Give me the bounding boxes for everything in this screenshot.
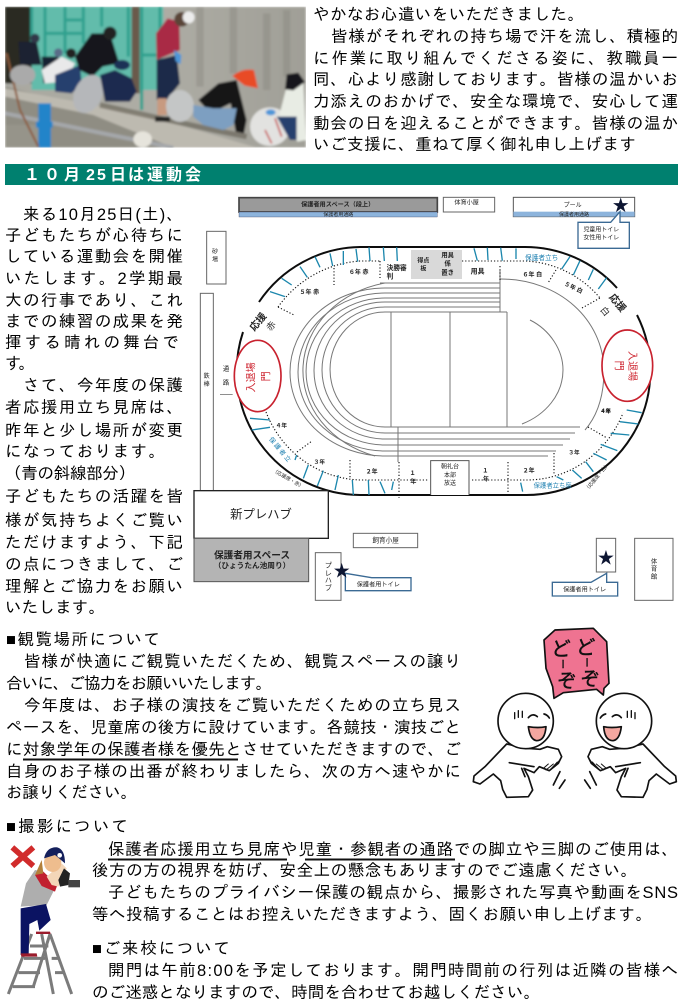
text block: coming to school: のご迷惑となりますので、時間を合わせてお越しください。 (92, 984, 540, 1002)
pool (513, 197, 635, 218)
section labels: 決勝審 (387, 263, 407, 272)
grade labels: ３年 (314, 458, 325, 466)
section labels: ４年 (600, 407, 612, 415)
text block: sports day introduction: 昨年と少し場所が変更 (5, 422, 183, 440)
text block: photography rules: 子どもたちのプライバシー保護の観点から、撮影された写真や動画をSNS (108, 884, 678, 902)
left entrance gate: 入退場 (245, 362, 258, 392)
callout: children's and women's toilets: ★ (612, 193, 630, 217)
cheering red label (247, 310, 278, 334)
section labels: 判 (387, 271, 394, 280)
prefab with toilet star: レ (325, 570, 332, 577)
gym storage shed (443, 197, 495, 212)
text block: sports day introduction: 様が気持ちよくご覧い (5, 512, 183, 530)
text block: sports day introduction: になっております。 (5, 443, 165, 461)
grade labels: ２年 (523, 467, 535, 475)
text block: thanks for the volunteers: 力添えのおかげで、安全な環境で、安心して運 (313, 92, 678, 111)
guardian space around the gourd pond: （ひょうたん池周り） (214, 560, 290, 570)
heading: sports day bar: １０月25日は運動会 (24, 166, 201, 184)
section labels: ５年 白 (563, 280, 584, 295)
section labels: ６年 白 (523, 270, 542, 278)
gym storage shed: 体育小屋 (454, 198, 479, 206)
right entrance gate: 門 (612, 361, 624, 371)
speech bubble: dozo dozo: ぞ (581, 670, 600, 691)
text block: viewing area: 今年度は、お子様の演技をご覧いただくための立ち見ス (24, 697, 461, 715)
sand pit: 場 (212, 255, 218, 263)
text block: sports day introduction: いたします。 (5, 599, 105, 617)
guardian standing labels: 保護者立ち席 (534, 481, 572, 490)
section labels: 置き (441, 268, 454, 276)
gymnasium: 育 (651, 564, 657, 573)
callout: guardian toilet near prefab: 保護者用トイレ (357, 580, 400, 588)
gymnasium (635, 538, 673, 600)
passage label (220, 363, 233, 394)
text block: thanks for the volunteers: 動会の日を迎えることができます。皆様の温か (313, 115, 678, 133)
left entrance gate (234, 340, 281, 412)
toilet building with star (596, 538, 616, 572)
chart: school grounds map (194, 193, 673, 600)
speech bubble: dozo dozo (544, 628, 609, 698)
grade labels: ３年 (568, 448, 580, 456)
morning assembly stand (431, 461, 469, 495)
speech bubble: dozo dozo: ど (576, 637, 595, 659)
text block: viewing area: お譲りください。 (6, 784, 137, 802)
text block: viewing area (6, 631, 462, 802)
text block: sports day introduction: 子どもたちが心待ちに (5, 227, 183, 245)
cheering seat notes: （応援席・赤） (271, 467, 305, 490)
person (21, 847, 80, 957)
text block: thanks for the volunteers: いご支援に、重ねて厚く御礼申し上げます (313, 135, 636, 154)
text block: photography rules: 保護者応援用立ち見席や児童・参観者の通路での脚立や三脚のご使用は、 (108, 841, 678, 859)
gymnasium: 体 (651, 556, 658, 565)
text block: sports day introduction: いたします。2学期最 (5, 270, 183, 288)
cheering seat notes: （応援席・白） (583, 461, 611, 493)
section labels (300, 251, 612, 415)
text block: thanks for the volunteers: に作業に取り組んでくださる姿に、教職員一 (313, 50, 678, 68)
dotted section dividers (266, 261, 623, 498)
callout: children's and women's toilets: 児童用トイレ (583, 225, 619, 233)
morning assembly stand: 朝礼台 (441, 463, 459, 471)
toilet building with star: ★ (597, 546, 615, 570)
text block: sports day introduction: 来る10月25日(土)、 (23, 206, 183, 224)
text block: sports day introduction: までの練習の成果を発 (5, 313, 183, 331)
text block: thanks for the volunteers: 皆様がそれぞれの持ち場で汗を流し、積極的 (331, 28, 678, 46)
morning assembly stand: 本部 (444, 471, 456, 479)
sand pit: 砂 (212, 247, 218, 255)
sand pit (207, 231, 226, 284)
text block: photography rules: 後方の方の視界を妨げ、安全上の懸念もありますのでご遠慮ください。 (92, 861, 637, 880)
text block: sports day introduction: 揮する晴れの舞台で (5, 334, 179, 352)
grade labels: ２年 (366, 468, 378, 476)
pool: プール (564, 202, 582, 209)
text block: sports day introduction: 理解とご協力をお願い (5, 578, 183, 596)
track: lanes and field (290, 270, 604, 462)
callout: children's and women's toilets (578, 193, 630, 248)
text block: viewing area: に対象学年の保護者様を優先とさせていただきますので、ご (6, 740, 462, 759)
section labels: ５年 赤 (300, 288, 319, 296)
text block: viewing area: ペースを、児童席の後方に設けています。各競技・演技ごと (6, 719, 461, 737)
text block: sports day introduction: 大の行事であり、これ (5, 292, 183, 310)
heading: sports day bar (5, 164, 678, 185)
section labels: 用具 (471, 267, 485, 275)
text block: viewing area: 自身のお子様の出番が終わりましたら、次の方へ速やかに (6, 763, 461, 781)
text block: coming to school: ■ご来校について (92, 940, 230, 958)
guardian standing labels (267, 435, 572, 490)
grade labels (276, 407, 611, 485)
left entrance gate: 門 (260, 371, 272, 381)
text block: sports day introduction: 子どもたちの活躍を皆 (5, 488, 183, 506)
text block: sports day introduction: の点につきまして、ご (5, 556, 184, 574)
section labels: ６年 赤 (349, 268, 368, 276)
iron bars: 棒 (204, 380, 210, 388)
section labels: 係 (445, 259, 452, 268)
hatches upper: guardian standing area (270, 247, 607, 297)
text block: photography heading: ■撮影について (6, 818, 128, 836)
text block: coming to school: 開門は午前8:00を予定しております。開門時間前の行列は近隣の皆様へ (108, 962, 678, 980)
text block: sports day introduction: ただけますよう、下記 (5, 534, 183, 552)
section labels: 得点 (417, 256, 429, 264)
text block: photography rules (92, 841, 678, 924)
passage label: 路 (223, 378, 230, 387)
text block: sports day introduction: さて、今年度の保護 (23, 377, 183, 395)
callout: guardian toilet near gym: 保護者用トイレ (563, 585, 606, 593)
illustration: two figures giving way with speech bubble (473, 628, 676, 797)
cheering seat notes (271, 461, 611, 493)
guardian space around the gourd pond: 保護者用スペース (214, 549, 290, 561)
prefab with toilet star: ブ (325, 583, 332, 592)
speech bubble: dozo dozo: ぞ (557, 671, 577, 692)
grade labels: １ (482, 468, 488, 475)
photo: volunteers weeding the school grounds (5, 7, 306, 148)
speech bubble: dozo dozo: ー (580, 657, 591, 667)
text block: coming to school (92, 940, 678, 1002)
text block: thanks for the volunteers (313, 6, 678, 154)
right entrance gate (602, 330, 653, 401)
text block: photography rules: 等へ投稿することはお控えいただきますよう、固くお願い申し上げます。 (92, 905, 652, 924)
prefab with toilet star: プ (325, 562, 332, 570)
iron bars: 鉄 (204, 372, 210, 380)
new prefab building: 新プレハブ (230, 506, 292, 521)
prefab with toilet star (315, 553, 341, 600)
outer stands boundary (237, 247, 650, 495)
gray equipment area (411, 250, 462, 279)
upper map labels and buildings (200, 193, 653, 569)
red cross (12, 847, 33, 866)
grade labels: 年 (483, 475, 489, 483)
right figure (585, 693, 676, 797)
hatches lower: guardian standing area (250, 410, 642, 495)
guardian standing label: 保護者立ち (525, 253, 558, 262)
speech bubble: dozo dozo: ー (556, 659, 567, 669)
callout: guardian toilet near prefab: ★ (333, 559, 351, 583)
grade labels: ４年 (600, 407, 611, 415)
guardian space on the upper terrace (239, 198, 437, 218)
grade labels: ４年 (276, 421, 287, 429)
lower map labels and buildings (194, 407, 673, 600)
text block: viewing area: ■観覧場所について (6, 631, 160, 649)
iron bars (200, 293, 213, 569)
cheering red label: 赤 (264, 319, 278, 333)
passage label: 通 (223, 363, 230, 372)
callout: guardian toilet near prefab (333, 559, 411, 591)
section labels: 用具 (441, 251, 455, 259)
cheering white label: 白 (598, 304, 612, 318)
guardian space on the upper terrace: 保護者用スペース（段上） (301, 201, 374, 209)
text block: sports day introduction: （青の斜線部分） (5, 465, 135, 483)
right entrance gate: 入退場 (626, 351, 639, 381)
grade labels: １ (410, 470, 416, 477)
text block: sports day introduction: 者応援用立ち見席は、 (5, 399, 183, 417)
guardian standing labels: 保護者立 (267, 435, 293, 464)
cheering white label (598, 291, 629, 318)
prefab with toilet star: ハ (325, 578, 332, 585)
animal hut (353, 533, 418, 548)
pool: 保護者用通路 (559, 211, 589, 218)
text block: viewing area: 合いに、ご協力をお願いいたします。 (6, 675, 272, 693)
cheering white label: 応援 (606, 291, 629, 315)
grade labels: 年 (410, 477, 416, 485)
gymnasium: 館 (651, 571, 658, 580)
callout: children's and women's toilets: 女性用トイレ (583, 234, 619, 242)
text block: thanks for the volunteers: やかなお心遣いをいただきました。 (313, 6, 584, 24)
new prefab building (194, 491, 328, 538)
guardian space on the upper terrace: 保護者用通路 (323, 211, 353, 218)
cheering red label: 応援 (247, 310, 269, 334)
guardian space around the gourd pond (194, 538, 309, 582)
icon: photographer on a stepladder with red cross (8, 847, 80, 994)
animal hut: 飼育小屋 (372, 536, 399, 545)
text block: viewing area: 皆様が快適にご観覧いただくため、観覧スペースの譲り (24, 653, 461, 671)
stepladder (8, 934, 72, 994)
text block: sports day introduction: す。 (5, 355, 35, 373)
text block: thanks for the volunteers: 同、心より感謝しております。皆様の温かいお (313, 71, 678, 89)
speech bubble: dozo dozo: ど (551, 638, 571, 660)
text block: sports day introduction: している運動会を開催 (5, 248, 183, 266)
callout: guardian toilet near gym (552, 573, 618, 596)
left figure (473, 693, 565, 797)
section labels: 板 (420, 264, 426, 272)
text block: sports day introduction (5, 206, 184, 617)
morning assembly stand: 放送 (444, 479, 456, 487)
